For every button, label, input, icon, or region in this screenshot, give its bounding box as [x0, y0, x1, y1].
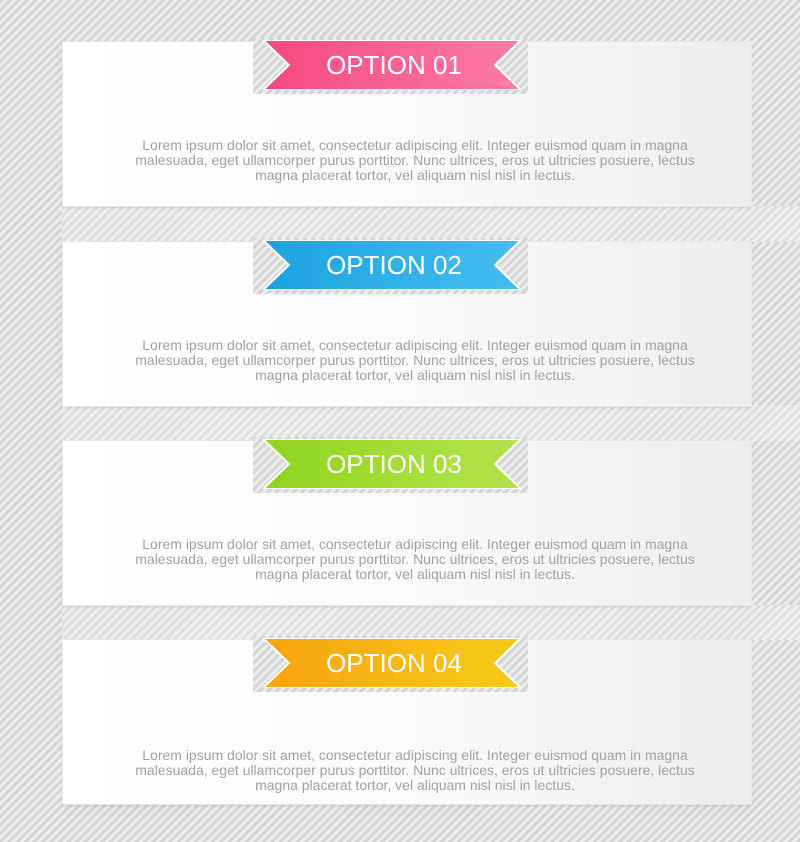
text block	[135, 536, 695, 582]
panel: option 04	[63, 640, 751, 804]
text block: malesuada, eget ullamcorper purus porttitor. Nunc ultrices, eros ut ultricies posuere, lectus	[135, 152, 695, 168]
text block: malesuada, eget ullamcorper purus porttitor. Nunc ultrices, eros ut ultricies posuere, lectus	[135, 551, 695, 567]
text block: malesuada, eget ullamcorper purus porttitor. Nunc ultrices, eros ut ultricies posuere, lectus	[135, 352, 695, 368]
text block: Lorem ipsum dolor sit amet, consectetur adipiscing elit. Integer euismod quam in magna	[142, 536, 688, 552]
text block: magna placerat tortor, vel aliquam nisl nisl in lectus.	[255, 367, 575, 383]
ribbon: option 02	[253, 238, 528, 294]
text block	[135, 747, 695, 793]
text block: magna placerat tortor, vel aliquam nisl nisl in lectus.	[255, 777, 575, 793]
ribbon: option 04	[253, 636, 528, 692]
panel: option 02	[63, 242, 751, 406]
ribbon: option 04: OPTION 04	[326, 648, 462, 678]
ribbon: option 03	[253, 437, 528, 493]
text block	[135, 337, 695, 383]
panel: option 03	[63, 441, 751, 605]
text block: Lorem ipsum dolor sit amet, consectetur adipiscing elit. Integer euismod quam in magna	[142, 747, 688, 763]
panel: option 01	[63, 42, 751, 206]
text block: Lorem ipsum dolor sit amet, consectetur adipiscing elit. Integer euismod quam in magna	[142, 137, 688, 153]
text block: magna placerat tortor, vel aliquam nisl nisl in lectus.	[255, 167, 575, 183]
text block	[135, 137, 695, 183]
ribbon: option 02: OPTION 02	[326, 250, 462, 280]
text block: magna placerat tortor, vel aliquam nisl nisl in lectus.	[255, 566, 575, 582]
ribbon: option 03: OPTION 03	[326, 449, 462, 479]
text block: Lorem ipsum dolor sit amet, consectetur adipiscing elit. Integer euismod quam in magna	[142, 337, 688, 353]
ribbon: option 01: OPTION 01	[326, 50, 462, 80]
text block: malesuada, eget ullamcorper purus porttitor. Nunc ultrices, eros ut ultricies posuere, lectus	[135, 762, 695, 778]
ribbon: option 01	[253, 38, 528, 94]
